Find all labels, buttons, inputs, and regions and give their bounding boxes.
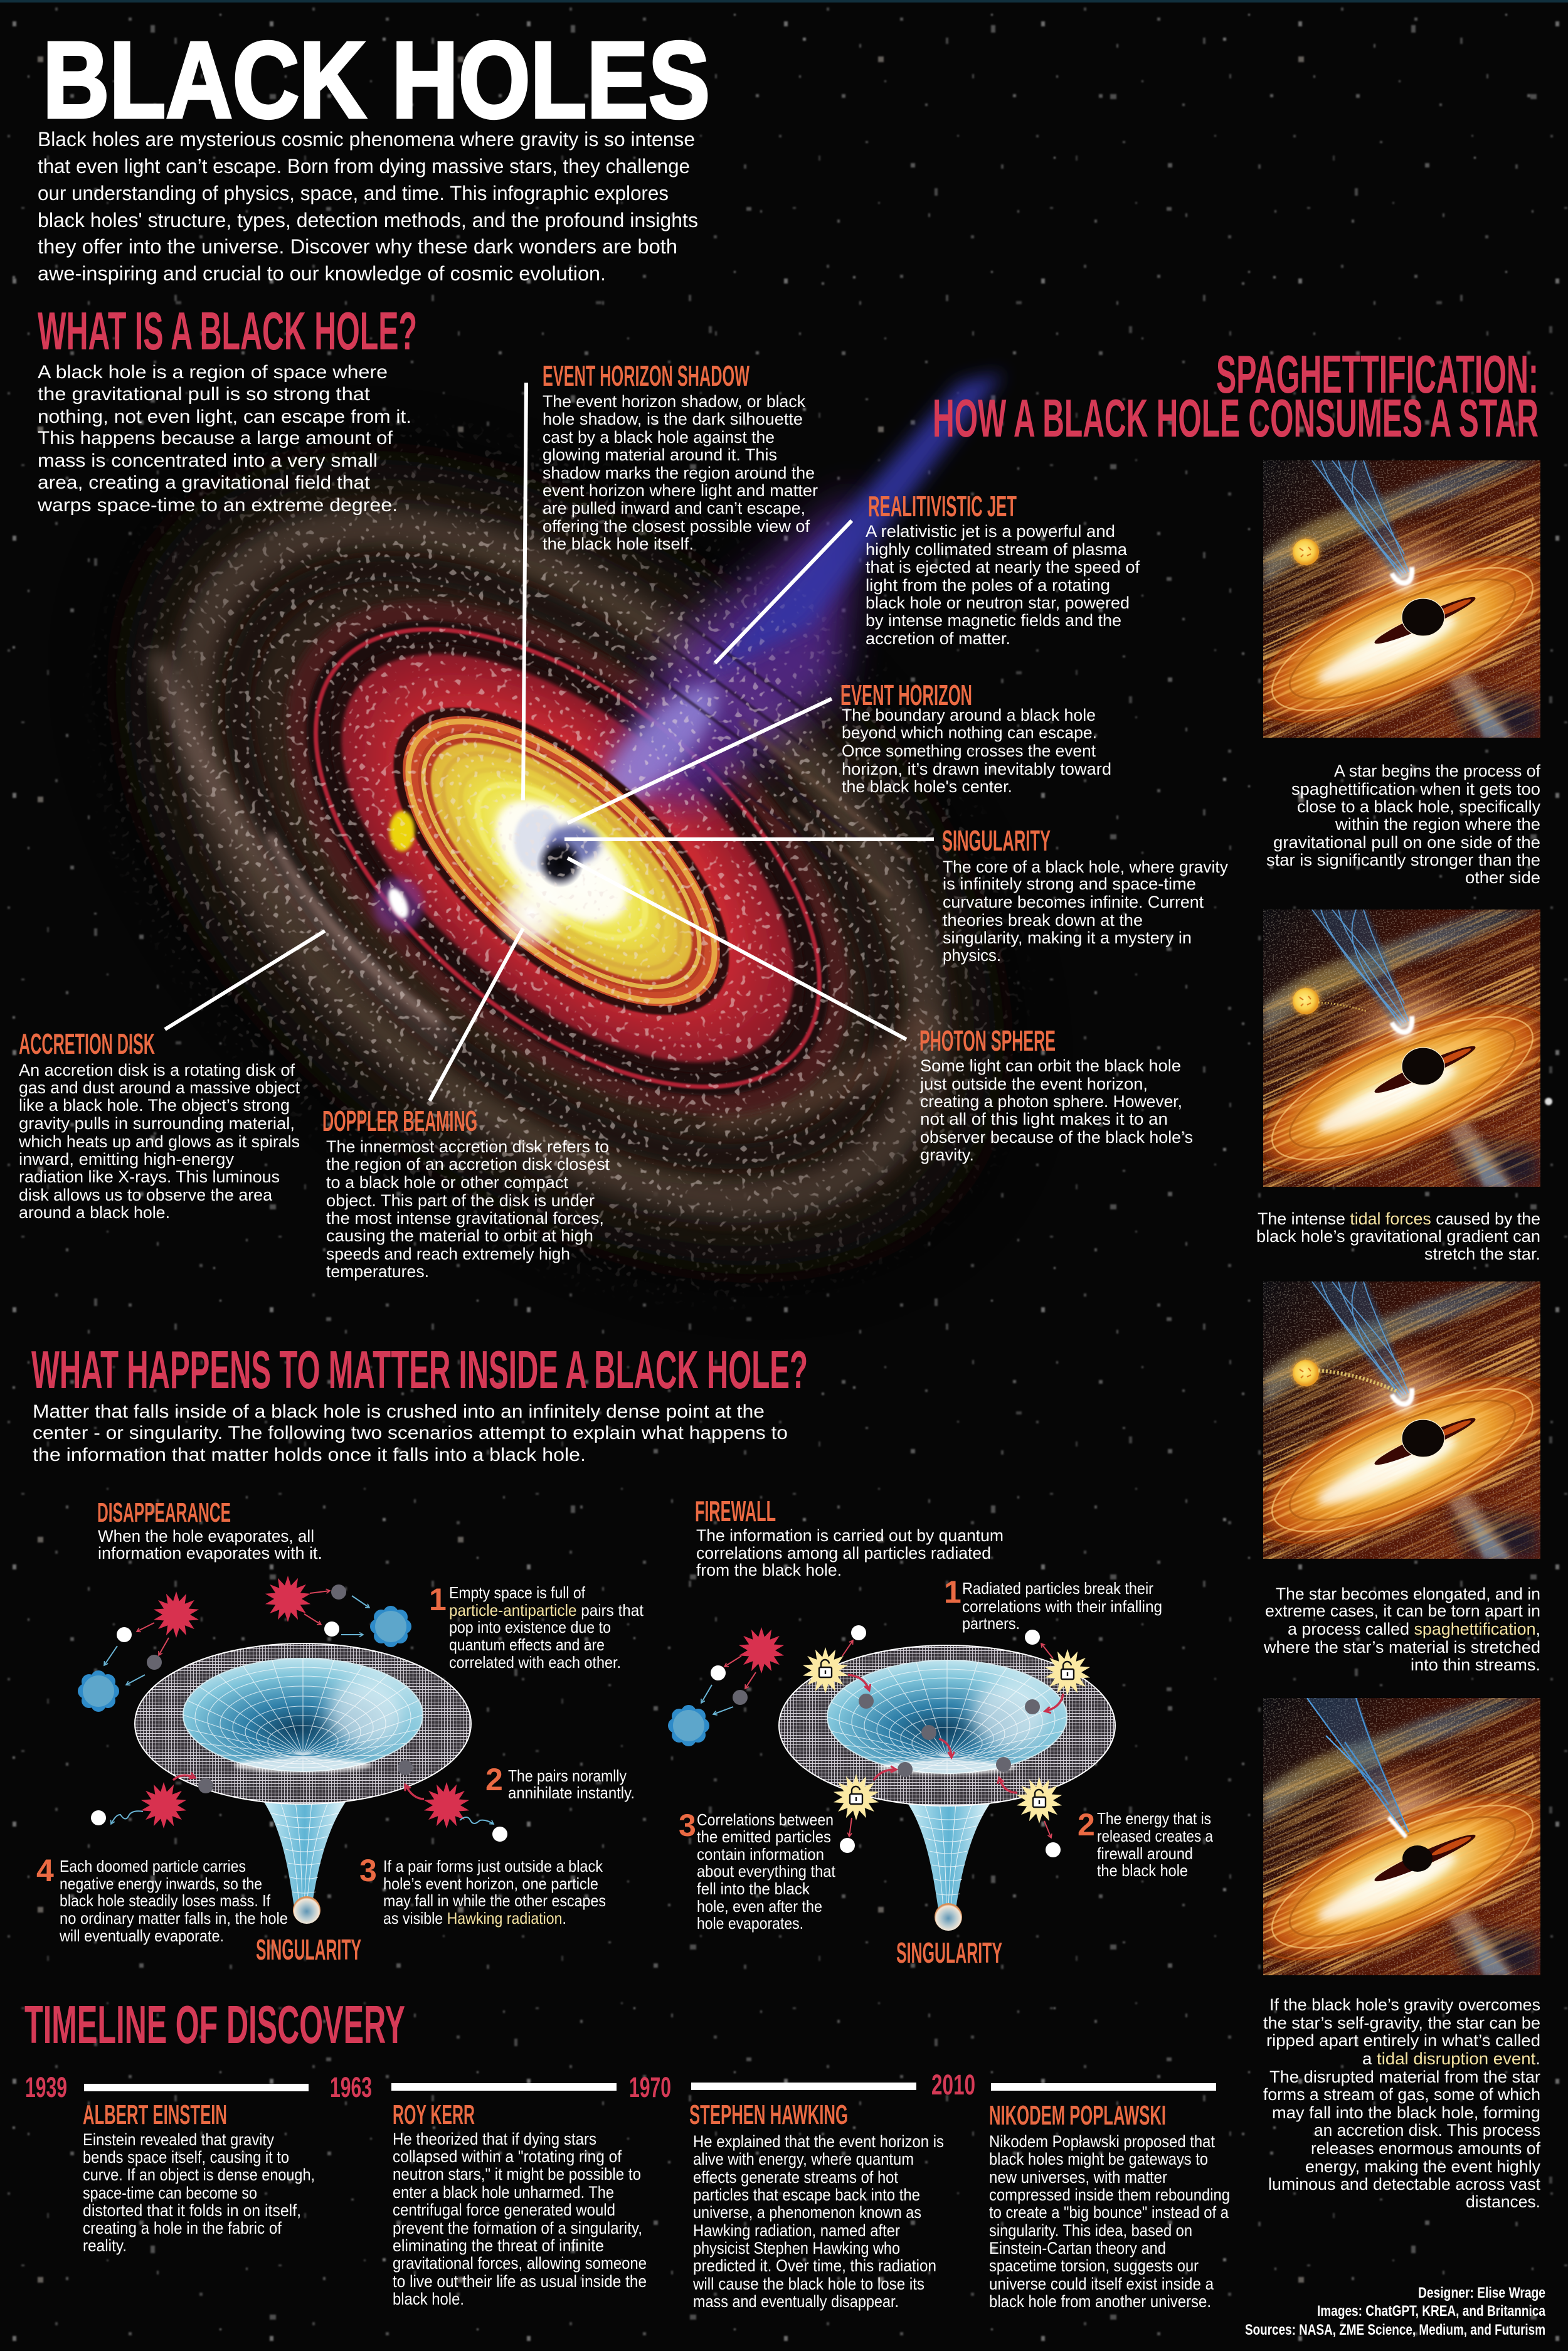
- timeline entry: nikodem poplawski: spacetime torsion, suggests our: [989, 2256, 1199, 2275]
- label: event horizon: horizon, it’s drawn inevitably toward: [842, 760, 1111, 778]
- label: accretion disk: inward, emitting high-energy: [19, 1150, 234, 1169]
- step 4: [36, 1853, 288, 1945]
- label: event horizon shadow: are pulled inward and can’t escape,: [543, 499, 805, 517]
- timeline entry: nikodem poplawski: compressed inside them rebounding: [989, 2185, 1230, 2204]
- label: relativistic jet: A relativistic jet is a powerful and: [866, 522, 1115, 541]
- definition text: warps space-time to an extreme degree.: [37, 495, 398, 516]
- step 1: 1: [944, 1574, 961, 1610]
- timeline entry: nikodem poplawski: to create a "big bounce" instead of a: [989, 2203, 1229, 2222]
- step 2: annihilate instantly.: [508, 1783, 635, 1802]
- step 4: black hole steadily loses mass. If: [60, 1891, 271, 1910]
- definition text: nothing, not even light, can escape from it.: [38, 406, 411, 427]
- label: event horizon: The boundary around a black hole: [842, 706, 1096, 724]
- caption: stage 4: If the black hole’s gravity overcomes: [1269, 1995, 1540, 2014]
- disappearance heading and summary: information evaporates with it.: [98, 1544, 322, 1563]
- step 2: [485, 1762, 635, 1802]
- line: singularity: [564, 837, 934, 841]
- label: accretion disk: like a black hole. The object’s strong: [19, 1096, 290, 1115]
- timeline entry: roy kerr: to live out their life as usual inside the: [393, 2272, 647, 2291]
- step 1: [429, 1582, 644, 1672]
- panel: firewall scenario: [668, 1495, 1213, 1969]
- timeline entry: stephen hawking: STEPHEN HAWKING: [689, 2099, 848, 2130]
- step 3: about everything that: [697, 1862, 836, 1881]
- label: event horizon shadow: shadow marks the region around the: [543, 464, 815, 482]
- singularity label: SINGULARITY: [256, 1933, 361, 1966]
- step 4: will eventually evaporate.: [59, 1926, 224, 1945]
- step 2: firewall around: [1097, 1844, 1193, 1863]
- credits: [1245, 2285, 1546, 2338]
- line: event horizon shadow: [523, 383, 526, 800]
- intro text: that even light can’t escape. Born from dying massive stars, they challenge: [38, 155, 690, 178]
- heading: spaghettification: [933, 345, 1539, 448]
- funnel diagram: [135, 1643, 471, 1924]
- step 3: hole evaporates.: [697, 1914, 803, 1933]
- step 1: pop into existence due to: [449, 1618, 611, 1637]
- timeline entry: albert einstein: bends space itself, causing it to: [83, 2148, 289, 2167]
- timeline entry: stephen hawking: will cause the black hole to lose its: [692, 2274, 924, 2293]
- intro text: Black holes are mysterious cosmic phenomena where gravity is so intense: [38, 128, 695, 151]
- label: event horizon: the black hole's center.: [842, 777, 1012, 796]
- label: accretion disk: radiation like X-rays. This luminous: [19, 1167, 280, 1186]
- caption: stage 4: the star’s self-gravity, the star can be: [1263, 2014, 1540, 2032]
- galaxy illustration: accretion disk: [94, 364, 1044, 1311]
- step 1: Empty space is full of: [449, 1583, 586, 1602]
- timeline entry: roy kerr: [393, 2099, 647, 2308]
- label: photon sphere: just outside the event horizon,: [919, 1075, 1148, 1093]
- timeline entry: roy kerr: black hole.: [393, 2290, 464, 2308]
- line: doppler beaming: [430, 928, 523, 1101]
- step 1: correlations with their infalling: [962, 1597, 1162, 1616]
- timeline bars and years: 1970: [629, 2071, 671, 2103]
- label: doppler beaming: object. This part of the disk is under: [326, 1191, 595, 1210]
- intro text: they offer into the universe. Discover why these dark wonders are both: [38, 235, 677, 258]
- firewall heading and summary: [695, 1495, 1004, 1579]
- firewall heading and summary: The information is carried out by quantum: [696, 1526, 1004, 1545]
- timeline entry: albert einstein: reality.: [83, 2236, 127, 2255]
- step 3: may fall in while the other escapes: [383, 1891, 606, 1910]
- label: singularity: physics.: [943, 946, 1001, 965]
- step 2: The pairs noramlly: [508, 1766, 627, 1785]
- label: event horizon shadow: glowing material around it. This: [543, 445, 777, 464]
- label: doppler beaming: DOPPLER BEAMING: [322, 1105, 477, 1137]
- singularity label: SINGULARITY: [896, 1936, 1002, 1969]
- callout lines: [165, 383, 934, 1101]
- line: photon sphere: [568, 858, 906, 1039]
- label: event horizon shadow: EVENT HORIZON SHADOW: [543, 359, 750, 392]
- step 4: no ordinary matter falls in, the hole: [60, 1909, 288, 1928]
- label: doppler beaming: speeds and reach extremely high: [326, 1244, 570, 1263]
- label: event horizon: [840, 679, 1111, 796]
- label: accretion disk: [18, 1027, 300, 1222]
- timeline entry: stephen hawking: Hawking radiation, named after: [693, 2221, 900, 2240]
- timeline entry: albert einstein: Einstein revealed that gravity: [83, 2130, 274, 2149]
- step 3: 3: [359, 1853, 377, 1888]
- caption: stage 4: [1263, 1995, 1540, 2211]
- timeline bars and years: 1939: [25, 2071, 67, 2103]
- label: accretion disk: which heats up and glows as it spirals: [18, 1132, 300, 1151]
- image: star stretched: [1263, 1282, 1540, 1559]
- step 1: 1: [429, 1582, 447, 1617]
- label: singularity: is infinitely strong and space-time: [943, 874, 1196, 893]
- label: accretion disk: An accretion disk is a rotating disk of: [19, 1061, 295, 1080]
- step 3: [679, 1808, 836, 1933]
- label: relativistic jet: by intense magnetic fields and the: [866, 611, 1121, 630]
- timeline entry: nikodem poplawski: Nikodem Popławski proposed that: [989, 2132, 1215, 2151]
- intro text: [38, 128, 698, 285]
- step 3: Correlations between: [697, 1810, 834, 1829]
- step 2: released creates a: [1097, 1827, 1213, 1845]
- step 2: The energy that is: [1097, 1809, 1211, 1828]
- timeline entry: nikodem poplawski: black holes might be gateways to: [989, 2150, 1208, 2168]
- caption: stage 3: into thin streams.: [1411, 1655, 1540, 1674]
- label: doppler beaming: the region of an accretion disk closest: [326, 1155, 610, 1174]
- step 1: particle-antiparticle pairs that: [449, 1601, 644, 1620]
- label: accretion disk: disk allows us to observe the area: [19, 1186, 273, 1204]
- firewall heading and summary: FIREWALL: [695, 1495, 776, 1527]
- label: event horizon: EVENT HORIZON: [840, 679, 972, 711]
- label: accretion disk: ACCRETION DISK: [19, 1027, 155, 1060]
- timeline entry: roy kerr: He theorized that if dying stars: [393, 2130, 596, 2148]
- caption: stage 4: energy, making the event highly: [1305, 2157, 1540, 2176]
- intro text: awe-inspiring and crucial to our knowledge of cosmic evolution.: [38, 262, 606, 285]
- timeline entry: nikodem poplawski: [989, 2100, 1230, 2311]
- image: tidal disruption event: [1263, 1698, 1540, 1975]
- definition text: the gravitational pull is so strong that: [38, 384, 371, 405]
- line: event horizon: [568, 699, 832, 823]
- timeline entry: albert einstein: space-time can become so: [83, 2184, 257, 2202]
- caption: stage 4: The disrupted material from the star: [1269, 2067, 1540, 2086]
- step 2: 2: [1078, 1807, 1095, 1842]
- timeline entry: roy kerr: collapsed within a "rotating ring of: [393, 2147, 622, 2166]
- caption: stage 1: star is significantly stronger than the: [1266, 851, 1540, 869]
- label: doppler beaming: causing the material to orbit at high: [326, 1226, 593, 1245]
- timeline entry: nikodem poplawski: black hole from another universe.: [989, 2292, 1211, 2311]
- label: singularity: singularity, making it a mystery in: [943, 928, 1192, 947]
- definition text: This happens because a large amount of: [38, 428, 393, 448]
- caption: stage 4: luminous and detectable across vast: [1268, 2175, 1540, 2194]
- timeline bars and years: 2010: [931, 2069, 975, 2101]
- label: doppler beaming: temperatures.: [326, 1262, 429, 1281]
- definition text: area, creating a gravitational field that: [38, 472, 371, 493]
- label: photon sphere: Some light can orbit the black hole: [920, 1056, 1181, 1075]
- definition text: A black hole is a region of space where: [38, 362, 388, 383]
- label: accretion disk: gas and dust around a massive object: [19, 1078, 300, 1097]
- step 3: hole, even after the: [697, 1897, 822, 1916]
- label: doppler beaming: the most intense gravitational forces,: [326, 1209, 604, 1228]
- matter text: [33, 1401, 788, 1465]
- timeline entry: nikodem poplawski: Einstein-Cartan theory and: [989, 2239, 1166, 2258]
- timeline entry: stephen hawking: mass and eventually disappear.: [693, 2292, 899, 2311]
- label: photon sphere: not all of this light makes it to an: [920, 1110, 1168, 1128]
- particles and arrows: [78, 1576, 507, 1842]
- timeline bars and years: [25, 2069, 1216, 2103]
- label: accretion disk: gravity pulls in surrounding material,: [19, 1114, 295, 1133]
- intro text: our understanding of physics, space, and time. This infographic explores: [38, 182, 669, 204]
- timeline entry: roy kerr: neutron stars," it might be possible to: [393, 2165, 641, 2184]
- step 4: negative energy inwards, so the: [60, 1874, 262, 1893]
- timeline entry: albert einstein: distorted that it folds in on itself,: [83, 2201, 301, 2220]
- label: event horizon shadow: event horizon where light and matter: [543, 481, 818, 500]
- disappearance heading and summary: DISAPPEARANCE: [97, 1497, 231, 1528]
- label: photon sphere: PHOTON SPHERE: [919, 1024, 1056, 1057]
- label: relativistic jet: accretion of matter.: [866, 629, 1010, 648]
- timeline entry: nikodem poplawski: NIKODEM POPLAWSKI: [989, 2100, 1166, 2131]
- caption: stage 2: [1256, 1209, 1540, 1263]
- timeline entry: stephen hawking: effects generate streams of hot: [693, 2168, 898, 2187]
- caption: stage 2: The intense tidal forces caused by the: [1258, 1209, 1540, 1228]
- label: event horizon shadow: the black hole itself.: [543, 534, 694, 553]
- caption: stage 1: spaghettification when it gets too: [1291, 780, 1540, 799]
- timeline entry: nikodem poplawski: singularity. This idea, based on: [989, 2221, 1192, 2240]
- caption: stage 4: forms a stream of gas, some of which: [1263, 2085, 1540, 2104]
- image: tidal forces begin: [1263, 910, 1540, 1187]
- intro text: black holes' structure, types, detection methods, and the profound insights: [38, 209, 698, 231]
- timeline entry: roy kerr: centrifugal force generated would: [393, 2200, 615, 2219]
- title: BLACK HOLES: [43, 19, 710, 141]
- label: singularity: SINGULARITY: [942, 824, 1051, 857]
- timeline entry: roy kerr: prevent the formation of a singularity,: [393, 2219, 642, 2237]
- timeline entry: albert einstein: curve. If an object is dense enough,: [83, 2165, 315, 2184]
- caption: stage 1: [1266, 762, 1540, 887]
- timeline entry: stephen hawking: universe, a phenomenon known as: [693, 2203, 921, 2222]
- line: relativistic jet: [715, 521, 852, 663]
- label: singularity: theories break down at the: [943, 911, 1143, 930]
- caption: stage 1: close to a black hole, specifically: [1297, 797, 1540, 816]
- caption: stage 4: a tidal disruption event.: [1362, 2049, 1540, 2068]
- definition text: [37, 362, 411, 516]
- matter text: the information that matter holds once it falls into a black hole.: [33, 1445, 586, 1465]
- heading: what is a black hole: WHAT IS A BLACK HOLE?: [38, 302, 417, 361]
- panel: disappearance scenario: [36, 1497, 644, 1966]
- step 1: [944, 1574, 1162, 1633]
- step 3: the emitted particles: [697, 1827, 831, 1846]
- caption: stage 4: distances.: [1466, 2192, 1540, 2211]
- label: event horizon shadow: The event horizon shadow, or black: [543, 392, 805, 411]
- label: event horizon shadow: cast by a black hole against the: [543, 428, 775, 447]
- timeline entry: nikodem poplawski: universe could itself exist inside a: [989, 2274, 1214, 2293]
- definition text: mass is concentrated into a very small: [38, 450, 378, 471]
- label: relativistic jet: [866, 490, 1140, 648]
- step 4: Each doomed particle carries: [60, 1857, 246, 1876]
- heading: what happens to matter: WHAT HAPPENS TO MATTER INSIDE A BLACK HOLE?: [31, 1340, 808, 1400]
- label: event horizon: Once something crosses the event: [842, 741, 1096, 760]
- step 3: hole’s event horizon, one particle: [383, 1874, 598, 1893]
- label: photon sphere: gravity.: [920, 1145, 974, 1164]
- caption: stage 4: releases enormous amounts of: [1311, 2139, 1540, 2158]
- step 3: as visible Hawking radiation.: [383, 1909, 566, 1928]
- timeline entry: stephen hawking: alive with energy, where quantum: [693, 2150, 914, 2168]
- caption: stage 3: a process called spaghettification,: [1288, 1620, 1540, 1638]
- label: event horizon shadow: [543, 359, 818, 553]
- timeline entry: stephen hawking: [689, 2099, 944, 2311]
- timeline entry: stephen hawking: physicist Stephen Hawking who: [693, 2239, 900, 2258]
- caption: stage 2: stretch the star.: [1424, 1244, 1540, 1263]
- timeline entry: albert einstein: ALBERT EINSTEIN: [83, 2099, 227, 2130]
- label: singularity: The core of a black hole, where gravity: [943, 857, 1228, 876]
- step 3: [359, 1853, 606, 1928]
- label: relativistic jet: that is ejected at nearly the speed of: [866, 558, 1140, 576]
- caption: stage 1: within the region where the: [1335, 815, 1540, 834]
- step 1: quantum effects and are: [449, 1635, 605, 1654]
- timeline entry: stephen hawking: He explained that the event horizon is: [693, 2132, 944, 2151]
- funnel diagram: [779, 1645, 1115, 1931]
- caption: stage 1: other side: [1465, 868, 1540, 887]
- label: doppler beaming: to a black hole or other compact: [326, 1173, 568, 1192]
- matter text: Matter that falls inside of a black hole is crushed into an infinitely dense point at the: [33, 1401, 765, 1422]
- step 1: correlated with each other.: [449, 1653, 621, 1672]
- label: photon sphere: creating a photon sphere. However,: [920, 1092, 1182, 1111]
- label: accretion disk: around a black hole.: [19, 1203, 170, 1222]
- timeline entry: albert einstein: creating a hole in the fabric of: [83, 2219, 282, 2237]
- caption: stage 1: gravitational pull on one side of the: [1273, 833, 1540, 852]
- caption: stage 1: A star begins the process of: [1334, 762, 1540, 780]
- step 3: 3: [679, 1808, 696, 1843]
- timeline entry: stephen hawking: predicted it. Over time, this radiation: [693, 2256, 936, 2275]
- label: relativistic jet: REALITIVISTIC JET: [868, 490, 1017, 523]
- timeline entry: roy kerr: ROY KERR: [393, 2099, 475, 2130]
- timeline entry: roy kerr: enter a black hole unharmed. The: [393, 2183, 614, 2202]
- caption: stage 3: [1263, 1584, 1540, 1674]
- timeline entry: roy kerr: gravitational forces, allowing someone: [393, 2254, 647, 2273]
- timeline bars and years: 1963: [330, 2071, 372, 2103]
- step 3: fell into the black: [697, 1879, 810, 1898]
- step 2: the black hole: [1097, 1861, 1188, 1880]
- timeline entry: albert einstein: [83, 2099, 315, 2255]
- line: accretion disk: [165, 931, 325, 1029]
- label: event horizon shadow: hole shadow, is the dark silhouette: [543, 410, 803, 428]
- disappearance heading and summary: When the hole evaporates, all: [98, 1527, 314, 1546]
- caption: stage 4: an accretion disk. This process: [1314, 2121, 1540, 2140]
- label: event horizon: beyond which nothing can escape.: [842, 723, 1097, 742]
- caption: stage 4: ripped apart entirely in what’s called: [1266, 2031, 1540, 2050]
- timeline entry: roy kerr: eliminating the threat of infinite: [393, 2236, 604, 2255]
- step 3: If a pair forms just outside a black: [383, 1857, 603, 1876]
- label: relativistic jet: light from the poles of a rotating: [866, 576, 1110, 595]
- label: doppler beaming: The innermost accretion disk refers to: [326, 1137, 609, 1156]
- firewall heading and summary: correlations among all particles radiated: [696, 1544, 991, 1563]
- caption: stage 4: may fall into the black hole, forming: [1272, 2103, 1540, 2122]
- timeline entry: stephen hawking: particles that escape back into the: [693, 2185, 920, 2204]
- step 1: partners.: [962, 1614, 1020, 1633]
- caption: stage 3: The star becomes elongated, and in: [1276, 1584, 1540, 1603]
- label: event horizon shadow: offering the closest possible view of: [543, 517, 810, 536]
- caption: stage 2: black hole’s gravitational gradient can: [1256, 1227, 1540, 1246]
- step 3: contain information: [697, 1845, 824, 1864]
- label: relativistic jet: black hole or neutron star, powered: [866, 593, 1130, 612]
- firewall heading and summary: from the black hole.: [696, 1561, 842, 1579]
- step 2: 2: [485, 1762, 503, 1797]
- particles, firewall bursts and arrows: [668, 1625, 1090, 1857]
- label: doppler beaming: [322, 1105, 610, 1281]
- label: relativistic jet: highly collimated stream of plasma: [866, 540, 1128, 559]
- image: star approaching black hole: [1263, 460, 1540, 738]
- disappearance heading and summary: [97, 1497, 322, 1563]
- caption: stage 3: where the star’s material is stretched: [1263, 1638, 1540, 1657]
- step 4: 4: [36, 1853, 54, 1888]
- label: photon sphere: observer because of the black hole’s: [920, 1128, 1193, 1147]
- label: singularity: [942, 824, 1228, 965]
- step 1: Radiated particles break their: [962, 1579, 1153, 1598]
- caption: stage 3: extreme cases, it can be torn apart in: [1265, 1601, 1540, 1620]
- step 2: [1078, 1807, 1213, 1880]
- timeline entry: nikodem poplawski: new universes, with matter: [989, 2168, 1167, 2187]
- label: singularity: curvature becomes infinite. Current: [943, 893, 1204, 911]
- label: photon sphere: [919, 1024, 1193, 1164]
- heading: timeline of discovery: TIMELINE OF DISCOVERY: [24, 1995, 405, 2055]
- matter text: center - or singularity. The following two scenarios attempt to explain what happens to: [33, 1423, 788, 1443]
